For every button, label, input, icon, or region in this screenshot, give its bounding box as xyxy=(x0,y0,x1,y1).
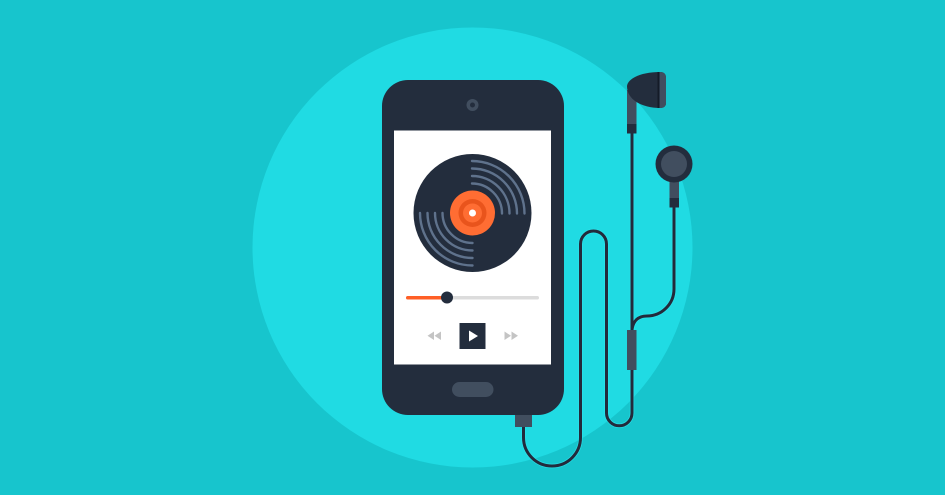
phone xyxy=(382,80,564,427)
record disc xyxy=(414,154,532,272)
grooves xyxy=(420,161,524,266)
record label xyxy=(450,190,495,236)
fast forward button xyxy=(504,332,518,340)
earphone cable xyxy=(524,133,674,466)
play button xyxy=(460,323,486,349)
screen xyxy=(394,130,551,364)
background circle xyxy=(252,28,692,468)
inline microphone xyxy=(627,330,636,370)
charging connector xyxy=(515,415,532,427)
progress slider xyxy=(406,292,539,304)
left earbud xyxy=(627,72,666,134)
rewind button xyxy=(428,332,441,340)
right earbud xyxy=(656,146,692,208)
phone body xyxy=(382,80,564,415)
camera xyxy=(466,99,478,111)
vinyl record xyxy=(414,154,532,272)
home button xyxy=(452,382,494,397)
